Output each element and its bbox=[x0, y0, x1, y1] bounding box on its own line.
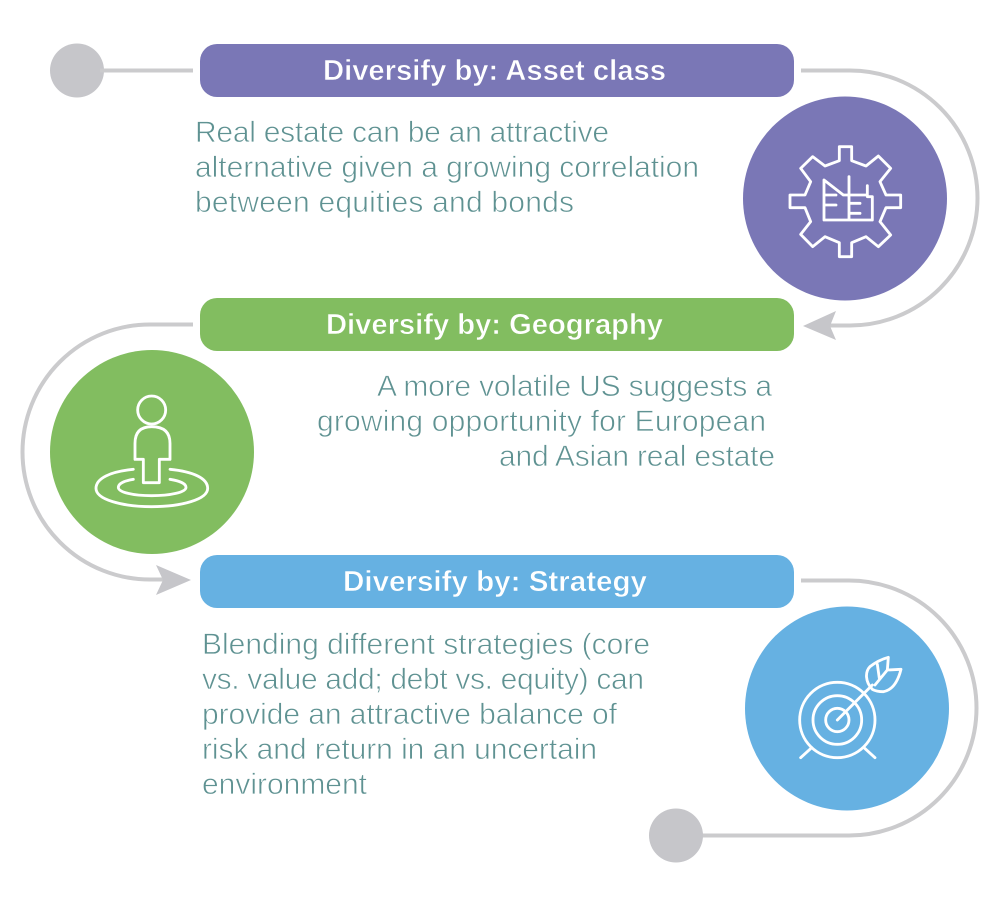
text block: strategy: vs. value add; debt vs. equity) can bbox=[202, 663, 644, 696]
icon: person on target bbox=[50, 350, 254, 554]
panel: asset class bbox=[195, 44, 947, 300]
text block: geography bbox=[317, 370, 775, 473]
heading: strategy bbox=[200, 555, 794, 608]
text block: geography: and Asian real estate bbox=[499, 440, 775, 473]
icon: target with arrow bbox=[745, 606, 949, 810]
icon: gear with buildings bbox=[743, 96, 947, 300]
heading: strategy: Diversify by: Strategy bbox=[343, 566, 647, 598]
text block: asset class bbox=[195, 116, 699, 219]
text block: strategy bbox=[202, 628, 650, 801]
text block: asset class: alternative given a growing correlation bbox=[195, 151, 699, 184]
text block: strategy: Blending different strategies (core bbox=[202, 628, 650, 661]
panel: geography bbox=[50, 298, 794, 554]
text block: geography: growing opportunity for European bbox=[317, 405, 766, 438]
start node connector bbox=[50, 44, 193, 98]
heading: geography: Diversify by: Geography bbox=[326, 309, 663, 341]
panel: strategy bbox=[200, 555, 949, 810]
arrow: asset class to geography bbox=[801, 70, 978, 340]
heading: asset class bbox=[200, 44, 794, 97]
heading: geography bbox=[200, 298, 794, 351]
text block: strategy: risk and return in an uncertain bbox=[202, 733, 597, 766]
text block: strategy: environment bbox=[202, 768, 368, 801]
text block: asset class: Real estate can be an attractive bbox=[195, 116, 609, 149]
heading: asset class: Diversify by: Asset class bbox=[323, 55, 666, 87]
text block: strategy: provide an attractive balance of bbox=[202, 698, 618, 731]
text block: geography: A more volatile US suggests a bbox=[377, 370, 772, 403]
arrow: geography to strategy bbox=[23, 324, 193, 595]
text block: asset class: between equities and bonds bbox=[195, 186, 574, 219]
end node connector bbox=[649, 580, 977, 862]
